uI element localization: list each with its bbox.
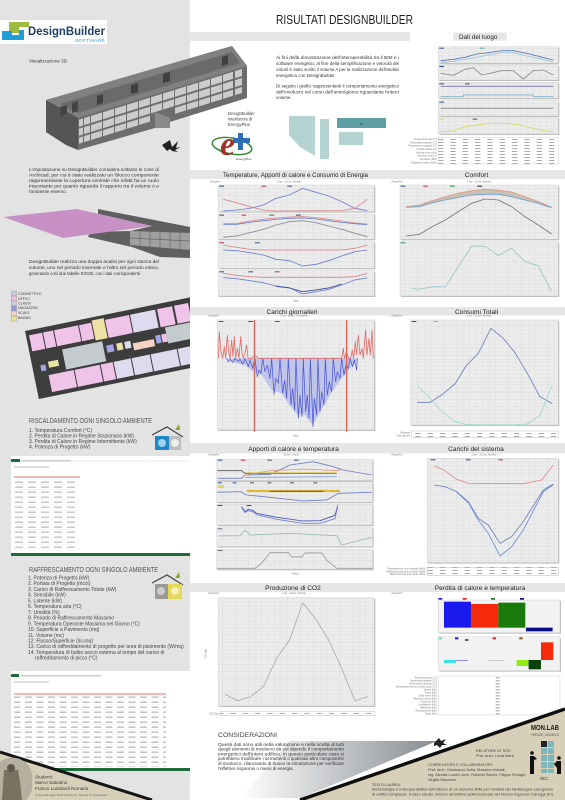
chart: CO2 production: CO2 (kg) xyxy=(206,649,208,658)
list: riscaldamento: 3. Perdita di Calore in Regime Intermittente (kW) xyxy=(29,439,137,445)
heading band: gains and system loads: Carichi del sistema xyxy=(448,446,504,453)
text: advisor: Prof. Arch. Lucia Marzi xyxy=(476,754,514,758)
chart: solar xyxy=(438,118,559,135)
list: raffrescamento: 7. Umidità (%) xyxy=(28,610,60,616)
panel: left sidebar xyxy=(0,0,190,800)
text: co-advisors: Prof. Arch. Gianfranco Sofia; Massimo Macali; xyxy=(428,768,505,772)
data table: Umidità relativa (%) xyxy=(416,148,437,151)
chart: temperature bars xyxy=(438,598,561,634)
text: advisor: RELATORE DI TESI: xyxy=(476,749,511,753)
legend: room types xyxy=(12,291,42,321)
data table: Solai interni (kW) xyxy=(419,695,437,698)
text: doppia analisi paragraph xyxy=(29,259,159,276)
icon: cooling house xyxy=(152,572,183,599)
text: co-advisors: CORRELATORI E COLLABORATORI: xyxy=(428,763,493,767)
icon: people stacking blocks xyxy=(530,741,561,781)
chart: total consumption xyxy=(392,315,559,438)
chart: temperatures xyxy=(217,459,374,482)
logo: DesignBuilder xyxy=(0,20,107,44)
list: raffrescamento: 3. Carico di Raffrescamento Totale (kW) xyxy=(28,587,117,593)
text: intro paragraph xyxy=(276,55,400,100)
chart: humidity xyxy=(217,528,374,548)
data table: DesignPro xyxy=(392,592,403,595)
chart: daily loads: Data xyxy=(293,435,299,438)
data table: Totale (kW) xyxy=(425,713,437,716)
heading band: gains and system loads: Apporti di calore e temperatura xyxy=(248,446,339,453)
caption: EnergyPlus interface: interfaccia di xyxy=(228,116,252,122)
data table: Temperatura aria (°C) xyxy=(414,677,437,680)
data table: Temperatura esterna a bulbo secco (°C) xyxy=(395,686,437,689)
heading band: daily loads and total consumption: Carichi giornalieri xyxy=(267,309,318,316)
list: raffrescamento: 4. Sensibile (kW) xyxy=(28,592,66,598)
list: raffrescamento: 6. Temperatura aria (°C) xyxy=(28,604,82,610)
heading band: temperature and comfort xyxy=(190,170,565,179)
chart: total consumption: Elettricità xyxy=(400,431,411,434)
volumes plan xyxy=(289,116,386,159)
text: MON.LAB xyxy=(531,725,559,737)
text: impostazione paragraph: importante per quanto riguarda il rapporto tra il volume A e xyxy=(29,184,160,188)
chart: pressure xyxy=(438,101,559,117)
chart: daily loads: DesignPro xyxy=(208,315,220,318)
chart: heat balance bars xyxy=(438,637,561,672)
building 3D model xyxy=(46,46,247,150)
text: impostazione paragraph: Archicad, per cui è stato realizzato un 'blocco componente xyxy=(29,172,160,178)
heading: Dati del luogo: Dati del luogo xyxy=(459,34,498,41)
data table: Temperatura di rugiada (°C) xyxy=(408,145,437,148)
text: co-advisors: Ing. Alessia Lucchi; Arch. Roberta Sacchi; Filippa Tinnagli; xyxy=(428,773,526,777)
data table: Pareti (kW) xyxy=(425,692,437,695)
data table: Temperatura aria (°C) xyxy=(414,138,437,141)
text: considerations paragraph: di involucro, rilanciando di nuovo la simulazione per verificare xyxy=(218,761,344,766)
text: intro paragraph: volume. xyxy=(276,95,292,100)
chart group: hourly gains and temperature xyxy=(208,454,374,575)
data table: Vetrate (kW) xyxy=(424,689,437,692)
text: considerations paragraph: quegli elementi di involucro da cui dipende il comportamento xyxy=(218,746,345,752)
legend: room types: MAGAZZINI xyxy=(18,306,38,310)
chart: CO2 production: CO2 (kg) xyxy=(209,713,219,715)
heading band: gains and system loads xyxy=(190,443,565,454)
chart: daily loads xyxy=(208,315,375,438)
chart: system loads: Raffrescamento zone totale (kWh) xyxy=(390,573,426,576)
heading band: daily loads and total consumption: Consumi Totali xyxy=(455,309,499,316)
chart group: temperature, gains, energy: 1 Jan - 31 Dec, Monthly xyxy=(277,180,302,183)
logo: DesignBuilder: DesignBuilder xyxy=(28,26,106,38)
legend: room types: BAGNO xyxy=(18,316,31,320)
heading band: CO2 and heat loss: Perdita di calore e temperatura xyxy=(435,585,526,592)
text: intro paragraph: software energetici, al fine della semplificazione e velocità dei xyxy=(276,61,399,66)
chart group: temperature, gains, energy: DesignPro xyxy=(210,180,222,183)
text: advisor xyxy=(476,749,514,758)
chart: system loads: 1 Jan - 31 Dec, Monthly xyxy=(472,454,497,457)
data table: Temperatura operante (°C) xyxy=(409,683,437,686)
data table: Radiazione solare (kWh) xyxy=(411,161,437,164)
volumes plan: A xyxy=(360,121,363,126)
list: raffrescamento: 12. Flusso/Superficie (l/s-mq) xyxy=(28,638,93,644)
icon: people stacking blocks: NIC. xyxy=(540,776,549,781)
text: considerations paragraph: l'effettivo risparmio o meno di energia. xyxy=(218,766,294,771)
footer corner: students: Studenti: xyxy=(35,774,53,780)
chart: daily loads: 1 Jan - 31 Dec, Giornaliero xyxy=(280,315,309,318)
list: raffrescamento: 8. Periodo di Raffrescamento Massimo xyxy=(28,616,114,622)
data table: Velocità vento (m/s) xyxy=(416,151,437,154)
building with purple roof sheet xyxy=(3,209,190,258)
legend: room types: CONNETTIVO xyxy=(18,292,42,296)
chart: comfort temperature xyxy=(400,185,559,240)
chart: CO2 production: 1 Jan - 31 Dec, Monthly xyxy=(282,592,307,595)
list: raffrescamento: 14. Temperatura di bulbo secco esterna al tempo del carico di xyxy=(28,650,164,656)
chart: system loads: Riscaldamento zone sensibile (kWh) xyxy=(388,568,426,571)
text: thesis title: TESI DI LAUREA: xyxy=(372,783,401,787)
legend: room types: SCALE xyxy=(18,311,30,315)
logo: DesignBuilder: SOFTWARE xyxy=(75,38,105,43)
chart: total gains xyxy=(218,271,375,297)
data table: Infiltrazioni (kW) xyxy=(420,707,437,710)
data table xyxy=(392,592,560,716)
text: intro paragraph: dell'involucro nel corso dell'anno/giorno riguardante l'intero xyxy=(276,90,400,94)
title: RISULTATI DESIGNBUILDER xyxy=(276,12,413,27)
icon: heating house xyxy=(152,424,183,450)
text: co-advisors xyxy=(428,763,526,782)
chart: comfort hours xyxy=(400,242,559,297)
chart: total consumption: Gas naturale xyxy=(397,435,411,438)
chart: humidity xyxy=(438,65,559,81)
data table: Temperatura radiante (°C) xyxy=(410,141,437,144)
text: considerations paragraph: energetico dell'intero edificio. In questo particolare caso si xyxy=(218,752,344,756)
text: impostazione paragraph: l'ambiente esterno. xyxy=(29,189,67,194)
chart group: comfort xyxy=(392,180,559,297)
chart: energy consumption xyxy=(218,185,375,213)
table screenshot: riscaldamento xyxy=(11,456,190,556)
data table: Riscaldamento (kW) xyxy=(416,710,437,713)
footer corner: students: Marco Sabatino xyxy=(35,780,68,785)
heading band: daily loads and total consumption xyxy=(190,307,565,316)
text: intro paragraph: energetica con DesignBuilder. xyxy=(276,73,336,78)
footer corner: credits xyxy=(300,709,565,800)
heading: considerazioni: CONSIDERAZIONI xyxy=(218,732,277,739)
icon: compass scribble xyxy=(162,140,181,152)
heading band: CO2 and heat loss: Produzione di CO2 xyxy=(265,585,321,592)
heading band: temperature and comfort: Comfort xyxy=(465,172,488,179)
icon: EnergyPlus logo xyxy=(211,126,253,163)
text: considerations paragraph: Questi dati sono utili nella valutazione e nella scelta di tutti xyxy=(218,742,344,747)
list: raffrescamento: 11. Volume (mc) xyxy=(28,633,64,639)
footer corner: students xyxy=(0,752,152,800)
section: Dati del luogo xyxy=(408,33,559,164)
heading: Dati del luogo xyxy=(453,33,507,41)
chart: heat gains xyxy=(218,242,375,269)
gradient wedge behind considerations xyxy=(240,741,437,798)
data table xyxy=(408,137,558,164)
footer corner: students: Franco Lumbardi Romano xyxy=(35,786,89,791)
text: impostazione paragraph: L'impostazione su DesignBuilder considera soltanto le zone di xyxy=(29,167,159,172)
chart: temperature xyxy=(438,47,559,64)
data table: Coperture (kW) xyxy=(421,701,437,704)
chart group: heat loss and temperature xyxy=(392,592,561,716)
chart group: hourly gains and temperature: DesignPro xyxy=(208,454,220,457)
text: intro paragraph: Di seguito i grafici rappresentanti il comportamento energetico xyxy=(276,84,399,88)
chart group: temperature, gains, energy: Data xyxy=(293,299,299,302)
list: riscaldamento xyxy=(29,428,137,450)
chart: system loads: DesignPro xyxy=(392,454,403,457)
icon: university seal xyxy=(0,758,32,800)
text: intro paragraph: Ai fini della dimostrazione dell'interoperabilità tra il BIM e i xyxy=(276,55,399,60)
text: impostazione paragraph xyxy=(29,167,160,194)
list: raffrescamento xyxy=(28,576,184,662)
text: doppia analisi paragraph: volume, uno nel periodo invernale e l'altro nel periodo estivo, xyxy=(29,265,159,270)
caption: EnergyPlus interface: DesignBuilder xyxy=(228,111,255,116)
legend: room types: UFFICI xyxy=(18,297,30,301)
chart: temperatures xyxy=(218,214,375,240)
text: considerations paragraph: potrebbero modificare i serramenti o qualsiasi altro componente xyxy=(218,756,344,761)
table screenshot: raffrescamento xyxy=(11,671,190,771)
caption: EnergyPlus interface: EnergyPlus xyxy=(228,122,250,127)
caption: EnergyPlus interface xyxy=(228,111,255,127)
text: doppia analisi paragraph: DesignBuilder realizza una doppia analisi per ogni stanza del xyxy=(29,259,159,264)
icon: compass scribble xyxy=(434,738,447,748)
title band xyxy=(190,32,410,41)
text: thesis title xyxy=(372,783,553,796)
chart group: hourly gains and temperature: 15 Gen, Orario xyxy=(283,454,299,457)
data table: Temperatura radiante (°C) xyxy=(410,680,437,683)
chart: system loads: Raffrescamento zone sensibile (kWh) xyxy=(387,570,426,573)
text: thesis title: di edifici complessi. Il caso studio: interno all'edificio polifunzionale del Nuovo Ingresso Careggi (FI) xyxy=(372,792,553,796)
chart: gains xyxy=(217,482,374,503)
list: raffrescamento: 5. Latente (kW) xyxy=(28,598,63,604)
text: doppia analisi paragraph: generando così due tabelle EXCEL con i dati corrispondenti. xyxy=(29,271,141,276)
chart: wind xyxy=(438,82,559,99)
text: intro paragraph: calcoli è stato scelto il volume A per la realizzazione dell'analisi xyxy=(276,67,399,72)
chart: total consumption: DesignPro xyxy=(392,315,403,318)
heading band: CO2 and heat loss xyxy=(190,583,565,592)
list: raffrescamento: 2. Portata di Progetto (mc/s) xyxy=(28,581,91,587)
text: considerations paragraph xyxy=(218,742,345,771)
chart group: hourly gains and temperature: Tempo xyxy=(292,573,299,575)
list: riscaldamento: 4. Potenza di Progetto (kW) xyxy=(29,444,91,450)
chart: heat balance xyxy=(217,504,374,526)
list: raffrescamento: raffreddamento di picco (°C) xyxy=(35,656,98,662)
heading band: temperature and comfort: Temperature, Apporti di calore e Consumo di Energia xyxy=(223,172,368,179)
text: co-advisors: Virgilia Mazzanti xyxy=(428,778,456,782)
list: raffrescamento: 9. Temperatura Operante Massima nel Giorno (°C) xyxy=(28,622,140,628)
list: riscaldamento: 2. Perdita di Calore in Regime Stazionario (kW) xyxy=(29,434,134,440)
chart group: temperature, gains, energy xyxy=(210,180,375,302)
legend: room types: CLASSI xyxy=(18,302,31,306)
chart: total consumption: 1 Jan - 31 Dec, Monthly xyxy=(467,315,492,318)
chart group: comfort: 1 Jan - 31 Dec, Monthly xyxy=(467,180,492,183)
list: raffrescamento: 10. Superficie a Pavimento (mq) xyxy=(28,627,100,633)
chart: system loads xyxy=(387,454,559,576)
icon: EnergyPlus logo: EnergyPlus xyxy=(236,157,252,161)
list: raffrescamento: 13. Carico di raffreddamento di progetto per area di pavimento (W/mq) xyxy=(28,644,184,650)
text: Visualizzazione 3D: Visualizzazione 3D xyxy=(29,58,68,64)
heading: raffrescamento: RAFFRESCAMENTO OGNI SINGOLO AMBIENTE xyxy=(29,565,158,574)
data table: Pressione (kPa) xyxy=(420,158,437,161)
list: riscaldamento: 1. Temperatura Comfort (°C) xyxy=(29,428,92,434)
icon: EnergyPlus logo: e xyxy=(220,126,235,163)
data table: Direzione vento (°) xyxy=(417,155,437,158)
data table: Ventilazione (kW) xyxy=(419,704,437,707)
chart group: comfort: DesignPro xyxy=(392,180,403,183)
chart: CO2 production: DesignPro xyxy=(208,592,220,595)
heading: riscaldamento: RISCALDAMENTO OGNI SINGOLO AMBIENTE xyxy=(29,416,152,425)
text: thesis title: Metodologia e interoperabilità nell'utilizzo di un sistema BIM per l'analisi del fabbisogno energetico xyxy=(372,788,553,792)
chart: CO2 production xyxy=(206,592,375,716)
chart: occupancy xyxy=(217,549,374,570)
text: MON.LAB: FIRENZE | DINAMICO xyxy=(531,733,559,737)
footer corner: students: Università degli Studi di Firenze, Scuola di Architettura xyxy=(35,793,108,797)
floor plan xyxy=(25,297,190,399)
text: impostazione paragraph: rappresentante la copertura centrale che infatti ha un ruolo xyxy=(29,178,160,183)
list: raffrescamento: 1. Potenza di Progetto (kW) xyxy=(28,576,90,582)
data table: Pavimenti esterni (kW) xyxy=(413,698,437,701)
text: MON.LAB: MON.LAB xyxy=(531,725,559,732)
